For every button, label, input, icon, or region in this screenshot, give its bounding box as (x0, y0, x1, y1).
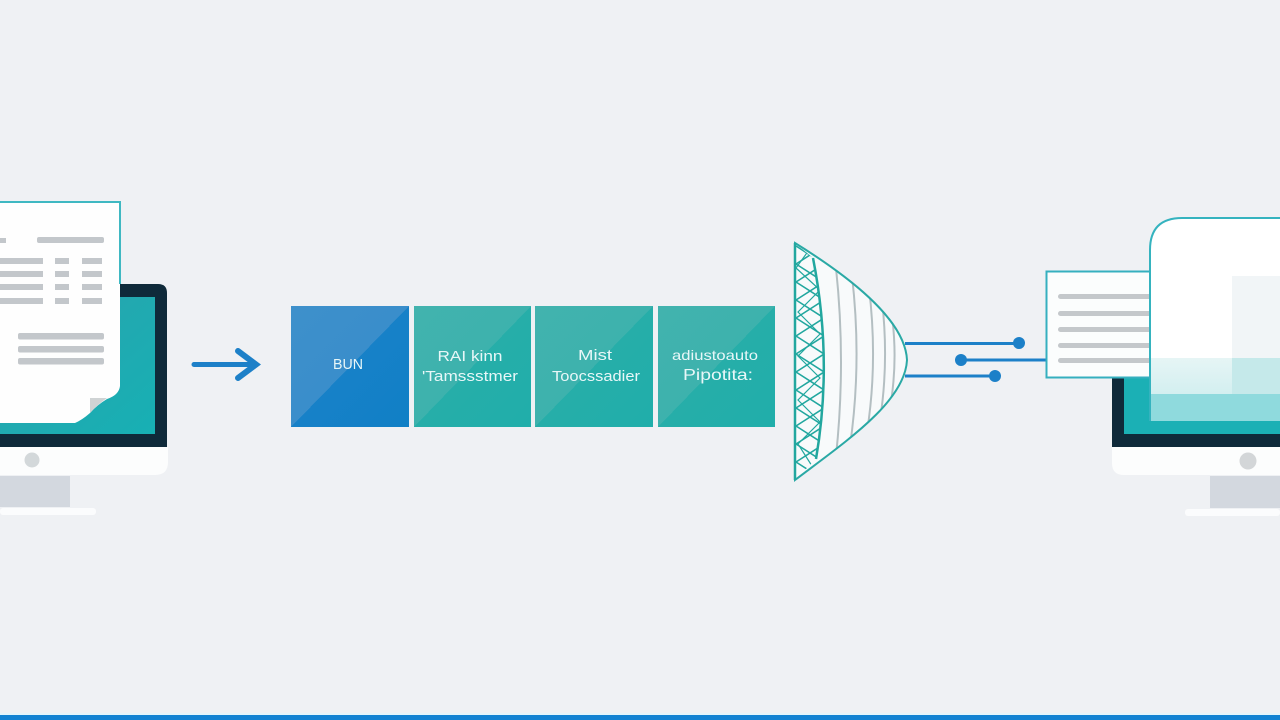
bottom accent bar (0, 713, 1280, 720)
monitor stand (1185, 476, 1280, 516)
monitor chin (0, 447, 168, 475)
large window panel (1150, 218, 1280, 421)
document sheet (0, 202, 120, 423)
funnel mesh band (796, 246, 824, 480)
arrow (194, 351, 256, 378)
monitor screen (0, 297, 155, 434)
box 2: 'Tamssstmer (422, 368, 518, 385)
monitor screen (1124, 376, 1280, 434)
box 4: Pipotita: (683, 367, 753, 384)
box 3: Toocssadier (552, 368, 640, 385)
monitor frame (1112, 376, 1280, 447)
box 4 (658, 306, 775, 427)
box 3 (535, 306, 653, 427)
monitor frame (0, 284, 167, 447)
box 3: Mist (578, 347, 613, 364)
funnel ribs (836, 268, 895, 456)
monitor button (1240, 452, 1256, 470)
funnel body (795, 243, 907, 480)
box 2 (414, 306, 531, 427)
box 4: adiustoauto (672, 347, 758, 363)
left monitor with document (0, 202, 168, 515)
small document (1046, 272, 1156, 378)
funnel filter (795, 243, 907, 480)
box 2: RAI kinn (438, 348, 502, 365)
box 1 (291, 306, 409, 427)
box 1: BUN (333, 356, 363, 373)
right monitor with documents (1046, 218, 1280, 516)
monitor chin (1112, 447, 1280, 475)
monitor button (24, 452, 40, 468)
funnel outline (795, 243, 907, 480)
monitor stand (0, 476, 96, 515)
connector lines (905, 337, 1046, 382)
pipeline boxes (291, 306, 775, 427)
